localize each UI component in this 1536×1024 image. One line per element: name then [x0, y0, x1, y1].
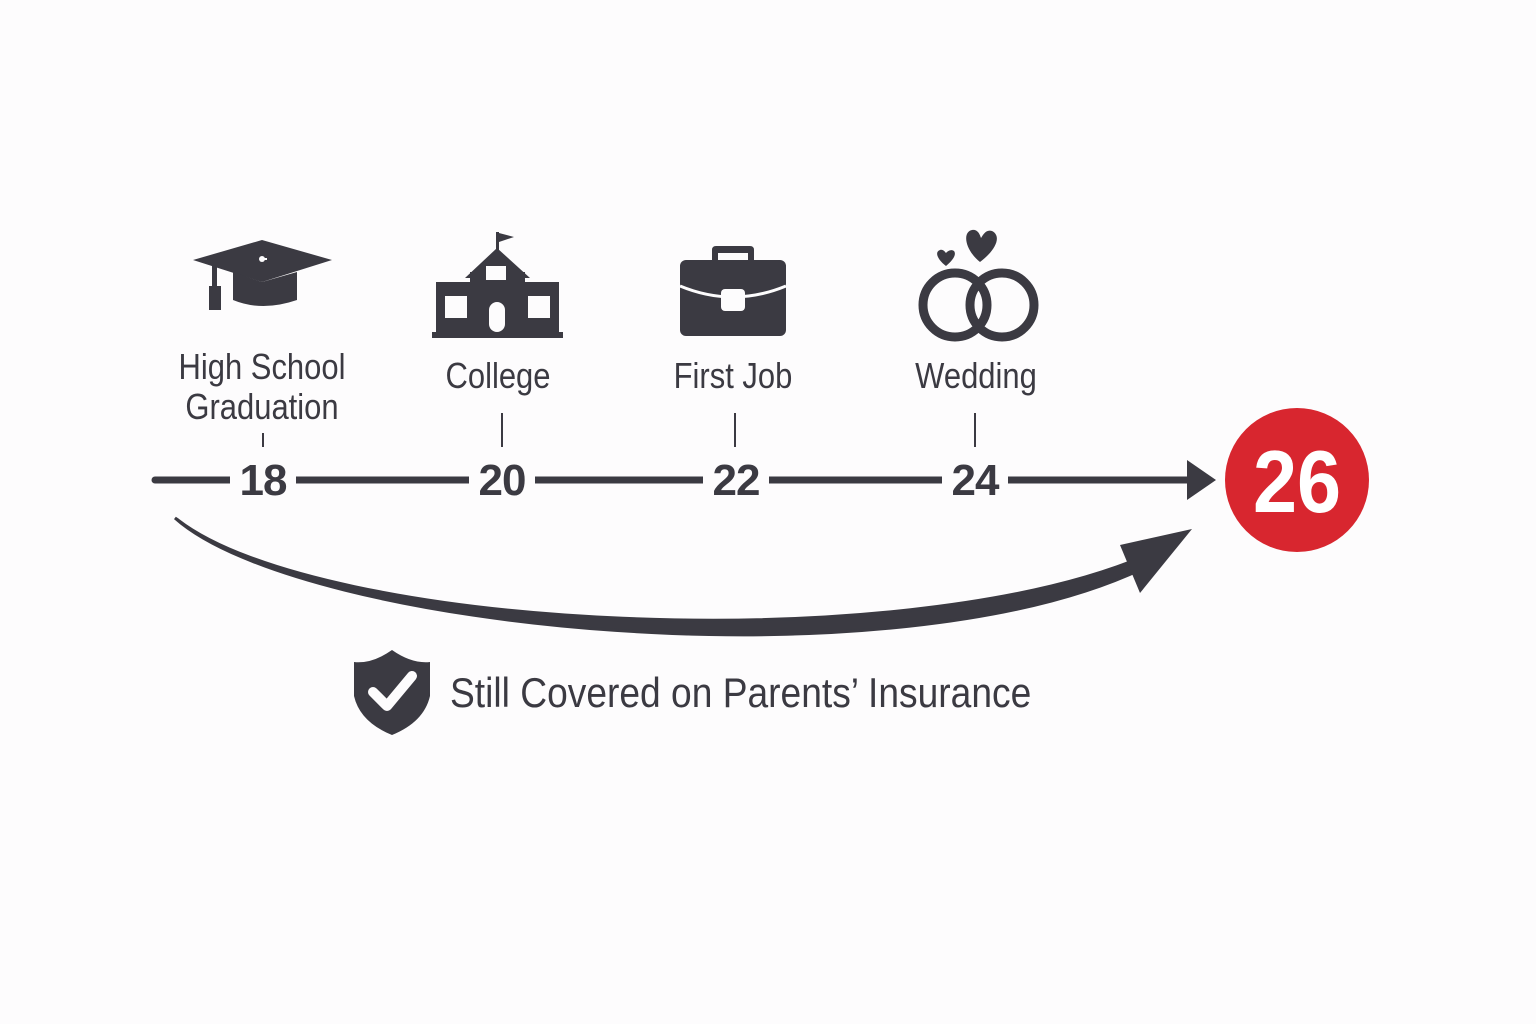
ticks	[263, 413, 975, 447]
curved arrow	[175, 518, 1192, 635]
text: 20	[479, 456, 525, 505]
icon: graduation cap	[193, 240, 332, 310]
red circle 26	[1225, 408, 1369, 552]
caption: Still Covered on Parents’ Insurance	[450, 669, 1031, 716]
icon: school	[432, 232, 563, 338]
label: high school graduation: High School	[179, 346, 345, 387]
text: 24	[952, 456, 998, 505]
label: first job: First Job	[674, 355, 792, 396]
number labels	[230, 456, 1008, 505]
red circle 26: 26	[1253, 432, 1341, 531]
icon: rings	[923, 230, 1034, 337]
text: 18	[240, 456, 286, 505]
text: 22	[713, 456, 759, 505]
icon: briefcase	[680, 246, 786, 336]
icon: shield check	[354, 650, 430, 735]
label: high school graduation: Graduation	[185, 386, 339, 427]
timeline line	[155, 460, 1216, 500]
label: college: College	[445, 355, 551, 396]
label: high school graduation	[179, 346, 345, 427]
label: wedding: Wedding	[915, 355, 1037, 396]
